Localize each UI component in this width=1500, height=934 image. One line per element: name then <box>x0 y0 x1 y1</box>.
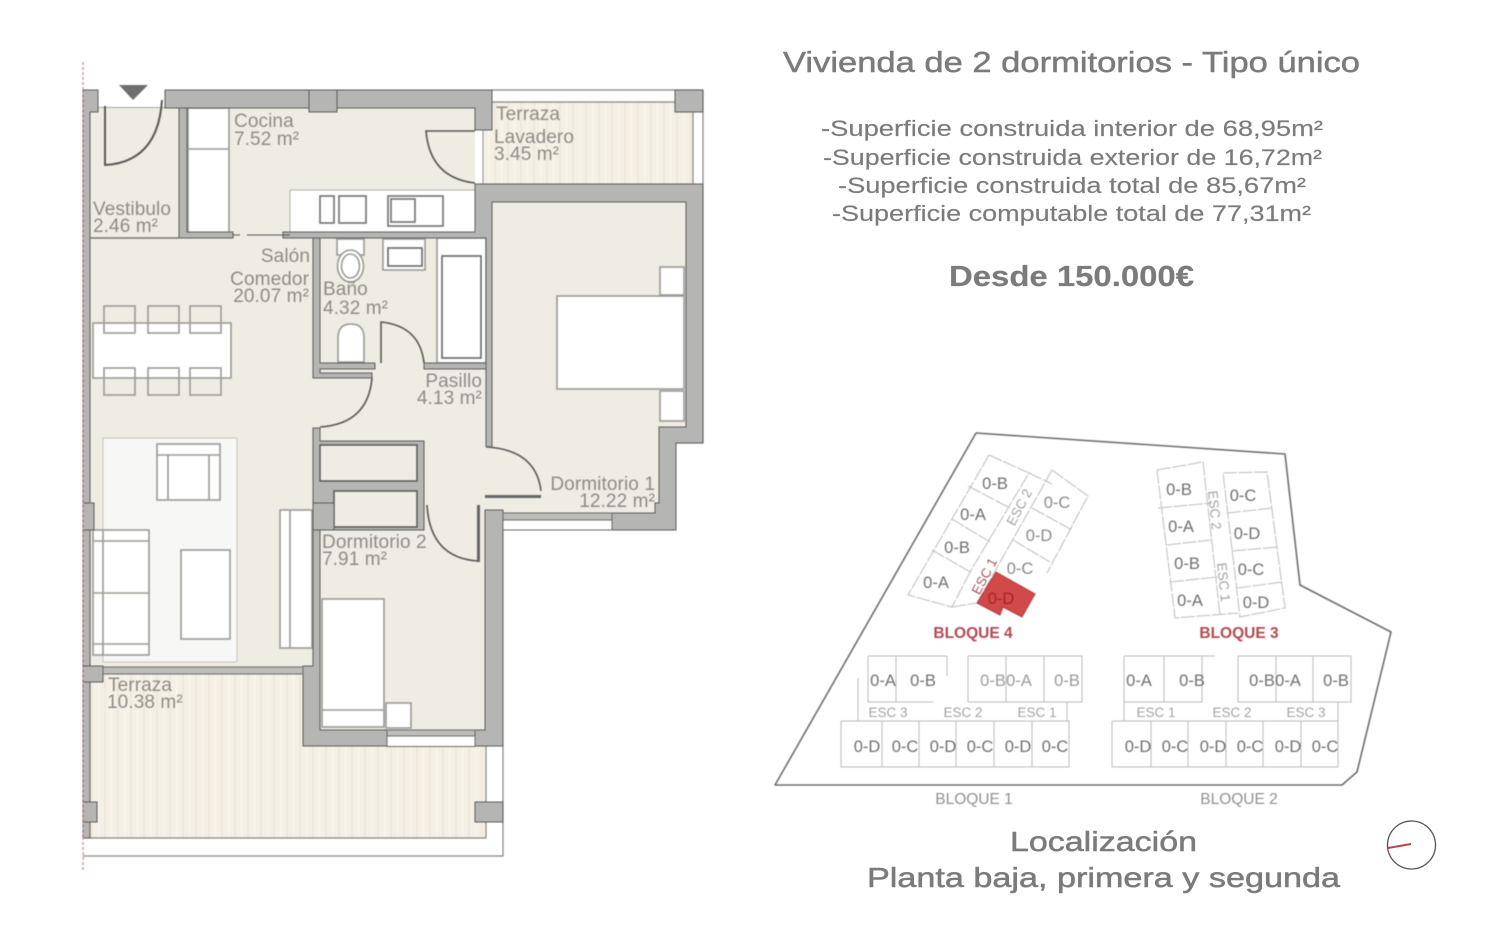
room labels: Cocina <box>234 111 294 132</box>
room labels: Dormitorio 1 <box>550 474 655 495</box>
block 3: 0-B <box>1166 481 1192 499</box>
icon: compass <box>1388 821 1436 869</box>
block 1 <box>841 656 1082 808</box>
entrance threshold line <box>98 106 165 108</box>
room labels: 4.32 m² <box>323 298 388 319</box>
block 3: ESC 1 <box>1214 562 1233 602</box>
block 2: 0-C <box>1312 738 1338 756</box>
dashed boundary line <box>82 62 84 872</box>
block 4: 0-A <box>960 506 986 524</box>
surface data: -Superficie construida total de 85,67m² <box>838 173 1306 198</box>
block 4: 0-A <box>923 574 949 592</box>
block 2: 0-D <box>1125 738 1151 756</box>
block 2: 0-D <box>1275 738 1301 756</box>
room labels: Terraza <box>108 675 172 696</box>
TV cabinet <box>280 510 312 648</box>
windows <box>103 513 612 746</box>
block 2: 0-A <box>1275 672 1301 690</box>
block 1: 0-D <box>930 738 956 756</box>
walls <box>83 90 703 838</box>
room labels: Pasillo <box>425 371 482 392</box>
bedroom furniture <box>322 267 684 728</box>
location heading <box>867 826 1341 893</box>
armchair <box>157 444 220 500</box>
room labels: Lavadero <box>494 127 574 148</box>
surface data: -Superficie construida interior de 68,95m² <box>821 116 1323 141</box>
room labels: 12.22 m² <box>579 491 655 512</box>
block 1: 0-C <box>892 738 918 756</box>
surface data <box>821 116 1323 226</box>
block 1: 0-C <box>1042 738 1068 756</box>
block 1 label: BLOQUE 1 <box>935 791 1013 808</box>
terrace: main <box>90 672 486 838</box>
site boundary <box>775 433 1391 785</box>
room labels: Salón <box>261 246 310 267</box>
block 2: 0-A <box>1126 672 1152 690</box>
room labels: Baño <box>323 279 368 300</box>
block 2 label: BLOQUE 2 <box>1200 791 1278 808</box>
icon: entrance triangle <box>119 85 148 100</box>
block 2: 0-D <box>1200 738 1226 756</box>
block 2: ESC 2 <box>1212 705 1252 720</box>
block 4: 0-B <box>944 539 970 557</box>
block 4: 0-B <box>982 475 1008 493</box>
floor plan <box>83 62 703 872</box>
terrace: lavadero <box>483 102 693 184</box>
site map <box>775 433 1391 808</box>
block 4: 0-C <box>1007 560 1033 578</box>
block 1: ESC 1 <box>1017 705 1057 720</box>
block 3: ESC 2 <box>1205 490 1224 530</box>
highlighted unit <box>977 572 1035 617</box>
block 4: 0-D <box>988 590 1014 608</box>
bathroom fittings <box>337 238 486 363</box>
block 3: 0-C <box>1238 561 1264 579</box>
doors <box>105 100 541 561</box>
block 3 label: BLOQUE 3 <box>1199 625 1279 642</box>
block 3 <box>1157 462 1285 642</box>
room labels: 4.13 m² <box>417 388 482 409</box>
location heading: Localización <box>1010 826 1197 857</box>
block 3: 0-A <box>1168 518 1194 536</box>
room labels: 7.52 m² <box>234 129 299 150</box>
block 4: ESC 1 <box>969 555 1000 597</box>
room labels: 3.45 m² <box>494 144 559 165</box>
room labels: Terraza <box>496 104 560 125</box>
block 4 <box>908 455 1088 642</box>
block 4: 0-D <box>1026 527 1052 545</box>
block 1: ESC 2 <box>943 705 983 720</box>
block 2: 0-C <box>1162 738 1188 756</box>
block 1: 0-D <box>854 738 880 756</box>
block 2: 0-B <box>1179 672 1205 690</box>
block 3: 0-A <box>1177 592 1203 610</box>
room labels: Dormitorio 2 <box>322 532 427 553</box>
kitchen fittings <box>188 108 475 234</box>
location heading: Planta baja, primera y segunda <box>867 862 1341 893</box>
room labels: 20.07 m² <box>233 286 309 307</box>
room labels <box>93 104 655 713</box>
price: Desde 150.000€ <box>949 261 1194 293</box>
block 1: 0-B <box>1054 672 1080 690</box>
block 2: ESC 3 <box>1286 705 1326 720</box>
block 1: 0-A <box>1006 672 1032 690</box>
room labels: 10.38 m² <box>107 692 183 713</box>
outer balcony outline <box>83 90 703 856</box>
living room rug and furniture <box>93 438 312 662</box>
room labels: 7.91 m² <box>322 549 387 570</box>
surface data: -Superficie construida exterior de 16,72m² <box>823 145 1322 170</box>
surface data: -Superficie computable total de 77,31m² <box>832 201 1311 226</box>
block 2 <box>1112 656 1351 808</box>
block 3: 0-C <box>1230 487 1256 505</box>
sofa <box>93 530 149 655</box>
block 2: 0-B <box>1249 672 1275 690</box>
block 1: 0-B <box>980 672 1006 690</box>
block 3: 0-D <box>1234 525 1260 543</box>
block 1: 0-B <box>910 672 936 690</box>
interior floor <box>90 108 686 730</box>
block 1: 0-C <box>967 738 993 756</box>
dining table and chairs <box>93 306 231 395</box>
block 1: 0-A <box>870 672 896 690</box>
block 2: 0-C <box>1237 738 1263 756</box>
block 4: ESC 2 <box>1004 486 1035 528</box>
room labels: Vestibulo <box>93 199 171 220</box>
block 2: 0-B <box>1323 672 1349 690</box>
block 1: 0-D <box>1005 738 1031 756</box>
block 1: ESC 3 <box>868 705 908 720</box>
room labels: Comedor <box>230 269 310 290</box>
block 3: 0-D <box>1243 594 1269 612</box>
room labels: 2.46 m² <box>93 216 158 237</box>
block 2: ESC 1 <box>1136 705 1176 720</box>
block 4 label: BLOQUE 4 <box>933 625 1013 642</box>
block 4: 0-C <box>1044 494 1070 512</box>
coffee table <box>181 550 230 639</box>
title: Vivienda de 2 dormitorios - Tipo único <box>783 47 1360 79</box>
block 3: 0-B <box>1174 555 1200 573</box>
